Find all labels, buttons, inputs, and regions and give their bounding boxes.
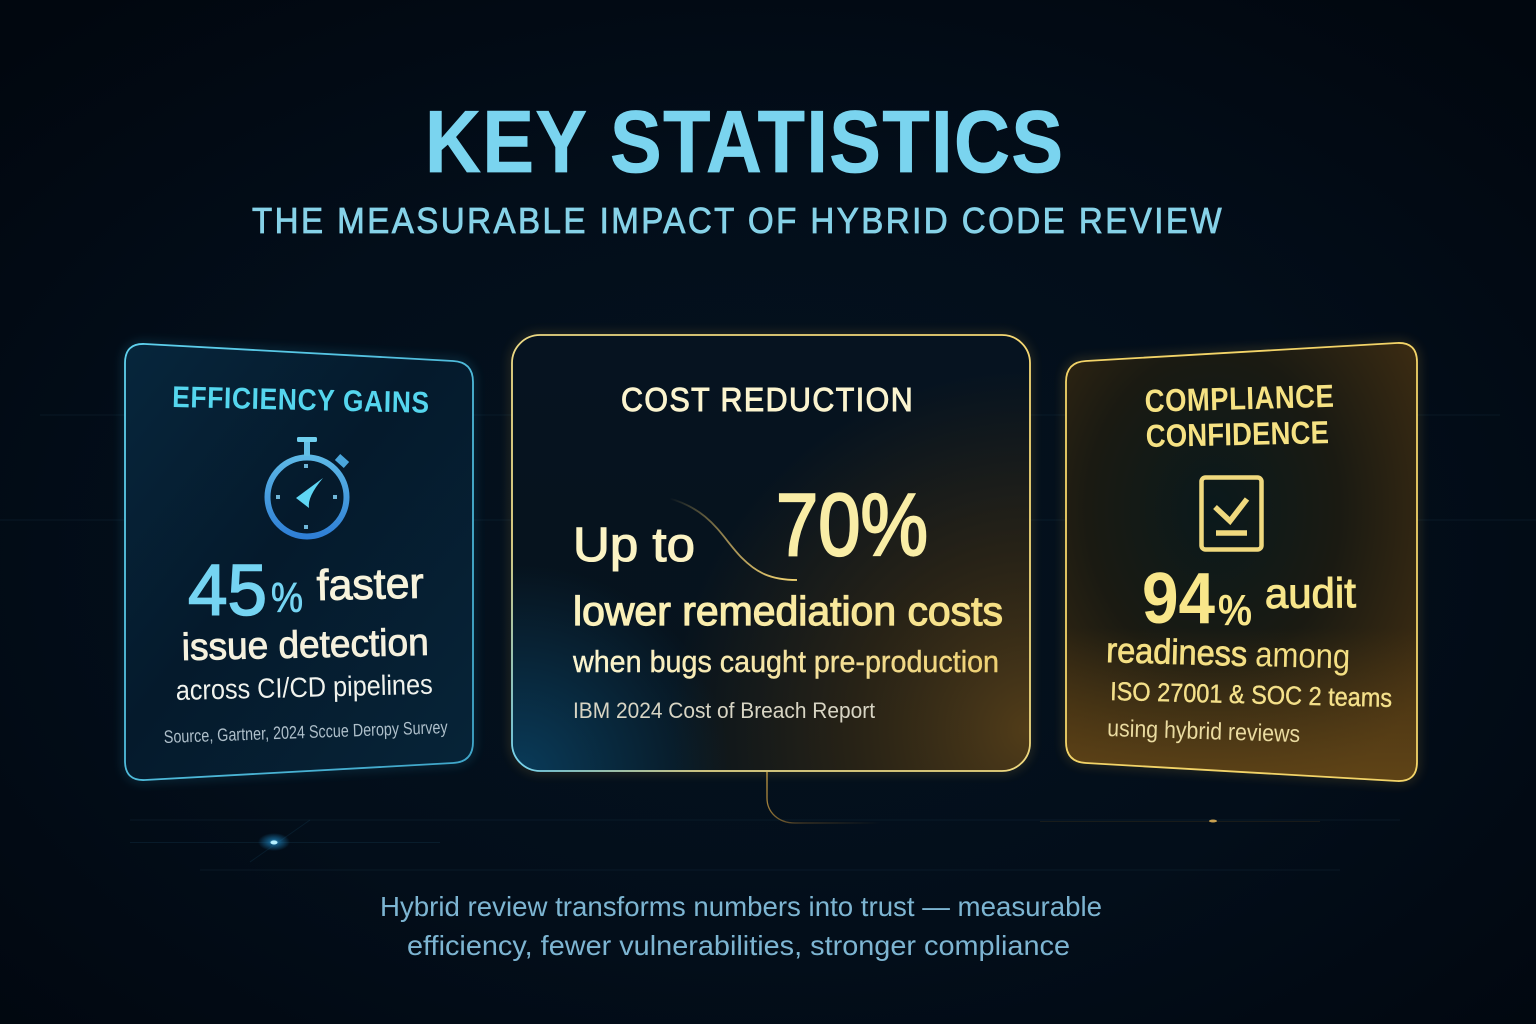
panel: compliance confidence [1066, 343, 1417, 781]
panel: cost reduction [512, 335, 1030, 771]
closing statement [380, 891, 1102, 961]
panel background: cost reduction [512, 335, 1030, 771]
text: issue detection: issue detection [181, 622, 429, 669]
heading: compliance confidence: CONFIDENCE [1145, 415, 1329, 455]
text: when bugs caught pre-production: when bugs caught pre-production [572, 644, 999, 679]
stat: 45% faster: faster [316, 560, 424, 610]
text: readiness among: readiness [1106, 631, 1248, 674]
glow: amber spark [1040, 820, 1320, 822]
subtitle: THE MEASURABLE IMPACT OF HYBRID CODE REVIEW [252, 202, 1222, 241]
text: across CI/CD pipelines: across CI/CD pipelines [175, 669, 433, 706]
heading: efficiency gains: EFFICIENCY GAINS [172, 379, 430, 419]
panel: efficiency gains [125, 344, 473, 780]
heading: compliance confidence: COMPLIANCE [1144, 379, 1334, 420]
closing statement: efficiency, fewer vulnerabilities, stronger compliance [407, 930, 1070, 961]
text: using hybrid reviews: using hybrid reviews [1107, 715, 1301, 748]
heading: cost reduction: COST REDUCTION [621, 381, 913, 418]
text: iso 27001 and soc 2 teams: ISO 27001 & SOC 2 teams [1110, 676, 1393, 713]
panel background: compliance confidence [1066, 343, 1417, 781]
stat: 94% audit [1142, 559, 1356, 639]
stat: 45% faster: 45 [188, 551, 267, 631]
connector curve [668, 498, 797, 580]
glow: blue spark [130, 820, 440, 862]
stat: 94% audit: % [1218, 586, 1252, 635]
connector line below panel [767, 772, 880, 823]
stat: 94% audit: 94 [1142, 559, 1215, 639]
text: readiness among [1106, 631, 1351, 677]
heading: compliance confidence [1144, 379, 1334, 455]
stat: 45% faster: % [271, 574, 303, 621]
icon: checklist [1202, 478, 1262, 550]
stat: 70%: 70% [776, 475, 928, 574]
stat: 45% faster [188, 551, 424, 631]
panel background: efficiency gains [125, 344, 473, 780]
stat: 94% audit: audit [1265, 569, 1356, 617]
text: up to: Up to [573, 519, 695, 572]
text: readiness among: among [1255, 635, 1351, 677]
source: gartner: Source, Gartner, 2024 Sccue Deropy Survey [163, 717, 448, 747]
closing statement: Hybrid review transforms numbers into trust — measurable [380, 891, 1102, 922]
text: lower remediation costs: lower remediation costs [573, 588, 1003, 634]
title: KEY STATISTICS [425, 92, 1063, 191]
icon: stopwatch [268, 437, 349, 536]
source: ibm: IBM 2024 Cost of Breach Report [573, 698, 875, 723]
